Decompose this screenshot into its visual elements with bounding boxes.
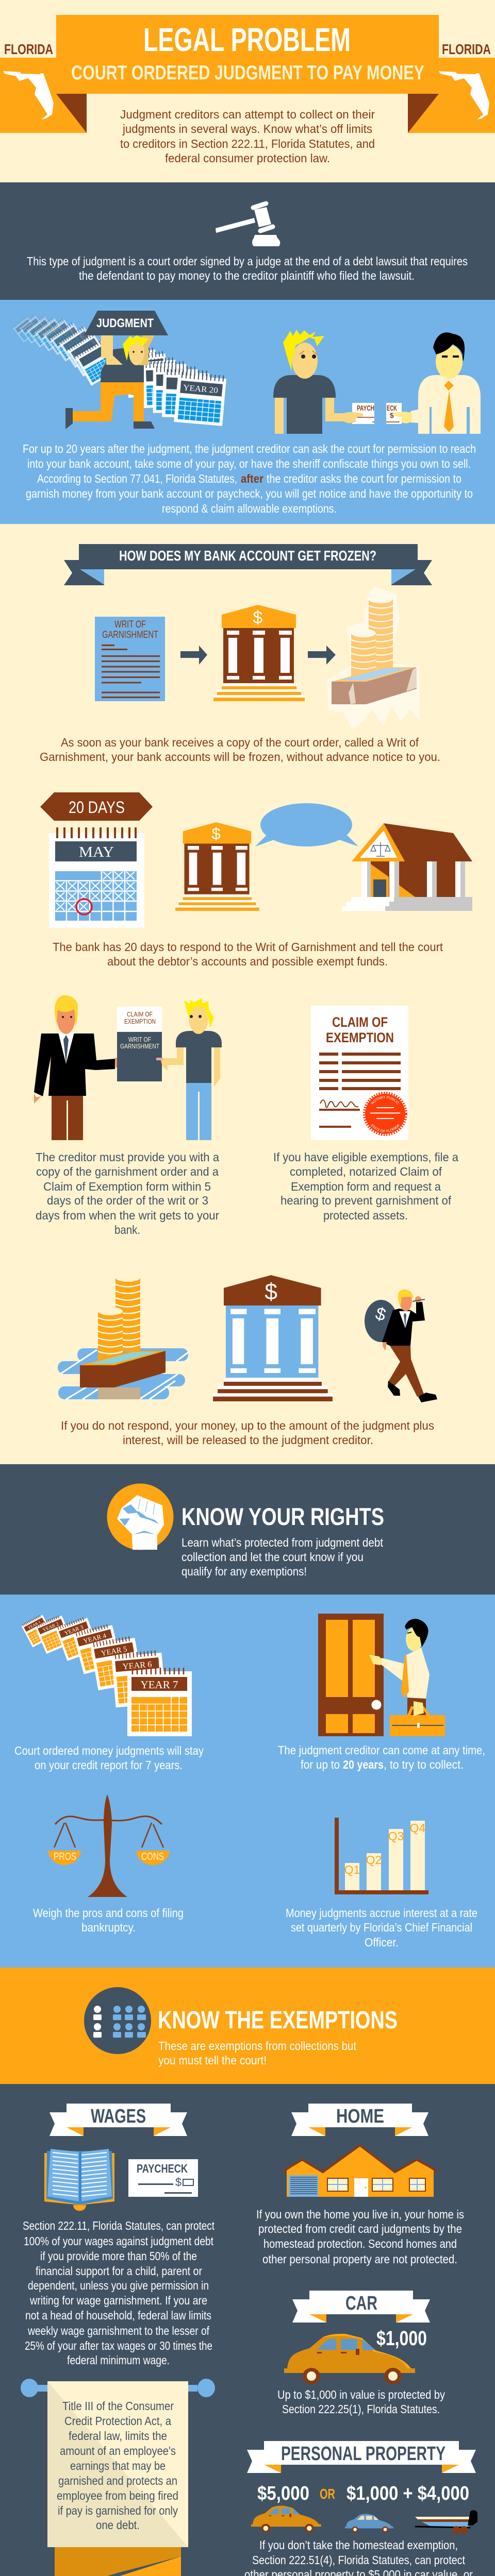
icon: writ of garnishment document bbox=[95, 617, 165, 701]
icon: people group bbox=[84, 1987, 151, 2054]
notary seal: STATE OF FLORIDA bbox=[371, 1124, 400, 1132]
scroll callout: federal law: Credit Protection Act, a bbox=[64, 2414, 171, 2428]
paycheck torn in two: PAYCH bbox=[357, 404, 374, 413]
definition text bbox=[27, 255, 468, 282]
creditor must provide text: days from when the writ gets to your bbox=[36, 1209, 219, 1222]
paycheck torn in two: $ bbox=[390, 411, 394, 419]
creditor must provide text: The creditor must provide you with a bbox=[36, 1150, 219, 1164]
credit report text: Court ordered money judgments will stay bbox=[14, 1744, 204, 1757]
document: claim and writ: GARNISHMENT bbox=[120, 1042, 159, 1050]
figure: creditor walking with money sack bbox=[365, 1290, 437, 1402]
panel: rights facts bbox=[0, 1595, 495, 1968]
panel: definition bbox=[0, 182, 495, 300]
value: personal property limits bbox=[257, 2483, 469, 2504]
home text: If you own the home you live in, your home is bbox=[256, 2208, 464, 2221]
icon: seven year calendars: YEAR 5 bbox=[101, 1645, 128, 1658]
icon: bank talking: $ bbox=[211, 825, 221, 843]
wages text: not a head of household, federal law limits bbox=[25, 2309, 211, 2322]
car text bbox=[277, 2388, 445, 2416]
icon: paycheck bbox=[128, 2159, 198, 2197]
car text: Section 222.25(1), Florida Statutes. bbox=[282, 2402, 440, 2416]
eligible exemptions text: completed, notarized Claim of bbox=[290, 1165, 442, 1178]
document: claim and writ: CLAIM OF bbox=[127, 1010, 153, 1018]
header panel bbox=[0, 15, 495, 165]
icon: Florida right bbox=[439, 71, 489, 120]
icon: seven year calendars bbox=[21, 1614, 192, 1736]
icon: calendar year 20: YEAR 20 bbox=[183, 383, 219, 395]
figure: creditor walking with money sack: $ bbox=[373, 1303, 388, 1325]
badge: 20 days: 20 DAYS bbox=[69, 798, 125, 817]
credit report text: on your credit report for 7 years. bbox=[35, 1758, 183, 1772]
car text: Up to $1,000 in value is protected by bbox=[277, 2388, 445, 2401]
scroll callout: federal law: garnished and protects an bbox=[58, 2474, 177, 2487]
rights intro text: collection and let the court know if you bbox=[182, 1550, 364, 1564]
wages text bbox=[23, 2219, 214, 2367]
ribbon: wages: WAGES bbox=[91, 2106, 146, 2127]
icon: bank paying out: $ bbox=[265, 1279, 277, 1304]
icon: fan of calendars bbox=[12, 314, 209, 418]
home text: protected from credit card judgments by the bbox=[258, 2222, 462, 2235]
arrow: writ to bank bbox=[180, 646, 207, 665]
rights intro text: qualify for any exemptions! bbox=[182, 1565, 307, 1578]
rights intro text: Learn what’s protected from judgment debt bbox=[182, 1536, 384, 1549]
heading: know the exemptions: KNOW THE EXEMPTIONS bbox=[158, 2007, 398, 2034]
notary seal bbox=[363, 1092, 407, 1136]
any time text: 20 years bbox=[343, 1758, 384, 1771]
scroll callout: federal law: one debt. bbox=[96, 2518, 140, 2532]
intro text: to creditors in Section 222.11, Florida Statutes, and bbox=[120, 137, 375, 150]
interest text bbox=[286, 1906, 477, 1949]
home text: other personal property are not protected. bbox=[262, 2252, 457, 2266]
scroll callout: federal law: earnings that may be bbox=[70, 2459, 166, 2472]
icon: claim of exemption form: CLAIM OF bbox=[332, 1014, 388, 1030]
judgment label: JUDGMENT bbox=[96, 316, 154, 330]
exemptions intro text bbox=[158, 2039, 357, 2067]
wages text: weekly wage garnishment to the lesser of bbox=[27, 2324, 210, 2337]
document: claim and writ: EXEMPTION bbox=[124, 1018, 156, 1025]
creditor must provide text: days of the order of the writ or 3 bbox=[47, 1194, 208, 1207]
rights intro text bbox=[182, 1536, 384, 1578]
judgment paragraph: respond & claim allowable exemptions. bbox=[162, 502, 337, 515]
paycheck torn in two bbox=[344, 403, 402, 424]
icon: May calendar bbox=[49, 827, 144, 928]
icon: seven year calendars: YEAR 3 bbox=[64, 1624, 85, 1637]
wages text: 25% of your after tax wages or 30 times the bbox=[25, 2339, 212, 2352]
wages text: dependent, unless you give permission in bbox=[28, 2279, 209, 2292]
home text bbox=[256, 2208, 464, 2266]
heading ribbon: HOW DOES MY BANK ACCOUNT GET FROZEN? bbox=[119, 548, 376, 564]
icon: boat on trailer bbox=[415, 2510, 477, 2534]
document: claim and writ bbox=[117, 1007, 162, 1081]
eligible exemptions text: protected assets. bbox=[323, 1209, 408, 1222]
intro text: Judgment creditors can attempt to collect on their bbox=[120, 108, 375, 121]
eligible exemptions text bbox=[273, 1150, 458, 1222]
intro text bbox=[120, 108, 375, 165]
icon: claim of exemption form bbox=[311, 1006, 408, 1140]
icon: bank talking bbox=[175, 822, 259, 911]
any time text bbox=[278, 1743, 485, 1771]
20 days text: The bank has 20 days to respond to the Writ of Garnishment and tell the court bbox=[53, 940, 443, 954]
ribbon: wages bbox=[50, 2104, 187, 2136]
document: claim and writ: WRIT OF bbox=[128, 1036, 151, 1043]
chart: quarterly interest: Q3 bbox=[388, 1829, 404, 1843]
icon: seven year calendars: YEAR 1 bbox=[27, 1620, 42, 1630]
wages text: if you provide more than 50% of the bbox=[40, 2249, 197, 2263]
creditor must provide text bbox=[36, 1150, 219, 1236]
exemptions intro text: you must tell the court! bbox=[158, 2054, 267, 2067]
bankruptcy text: bankruptcy. bbox=[81, 1921, 136, 1934]
icon: seven year calendars: YEAR 6 bbox=[122, 1659, 152, 1671]
exemptions intro text: These are exemptions from collections but bbox=[158, 2039, 357, 2053]
chart: quarterly interest: Q1 bbox=[344, 1863, 360, 1876]
ribbon: car: CAR bbox=[345, 2293, 377, 2314]
panel: exemptions list bbox=[0, 2084, 495, 2576]
ribbon: home: HOME bbox=[336, 2106, 384, 2127]
icon: frozen coins and cash bbox=[327, 586, 420, 730]
icon: law book bbox=[44, 2149, 114, 2211]
figure: creditor with paycheck bbox=[392, 332, 481, 434]
icon: door and creditor bbox=[318, 1614, 445, 1736]
heading ribbon bbox=[64, 544, 432, 585]
value: personal property limits: $5,000 bbox=[257, 2483, 309, 2504]
any time text: for up to bbox=[301, 1758, 340, 1771]
icon: courthouse bbox=[342, 823, 472, 911]
chart: quarterly interest: Q4 bbox=[410, 1821, 426, 1835]
icon: calendar year 20 bbox=[174, 371, 226, 426]
scroll callout: federal law: Title III of the Consumer bbox=[62, 2399, 174, 2413]
scroll callout: federal law: employee from being fired bbox=[57, 2489, 178, 2502]
frozen text bbox=[40, 736, 440, 764]
wages text: 100% of your wages against judgment debt bbox=[24, 2234, 214, 2248]
title: LEGAL PROBLEM bbox=[143, 21, 351, 58]
icon: orange car bbox=[251, 2505, 321, 2533]
scroll callout: federal law: if pay is garnished for only bbox=[58, 2504, 178, 2517]
personal property text: If you don’t take the homestead exemption, bbox=[259, 2538, 458, 2552]
value: car limit: $1,000 bbox=[376, 2327, 427, 2350]
judgment paragraph: the creditor asks the court for permission to bbox=[267, 472, 461, 485]
bankruptcy text bbox=[33, 1906, 184, 1934]
paycheck torn in two: ECK bbox=[387, 404, 397, 413]
judgment paragraph bbox=[23, 442, 476, 515]
icon: pros and cons scale: CONS bbox=[141, 1851, 164, 1862]
icon: bank bbox=[213, 605, 305, 701]
icon: blue car bbox=[345, 2514, 393, 2533]
judgment paragraph: after bbox=[241, 472, 263, 485]
wages text: financial support for a child, parent or bbox=[36, 2264, 202, 2278]
judgment weight bbox=[84, 311, 168, 335]
icon: pros and cons scale: PROS bbox=[54, 1851, 76, 1862]
icon: raised fist bbox=[107, 1484, 173, 1550]
eligible exemptions text: If you have eligible exemptions, file a bbox=[273, 1150, 458, 1164]
icon: writ of garnishment document: GARNISHMENT bbox=[102, 630, 158, 640]
scroll callout: federal law: federal law, limits the bbox=[69, 2429, 167, 2443]
notary seal: NOTARY PUBLIC bbox=[371, 1096, 399, 1105]
figure: creditor in suit bbox=[34, 995, 126, 1140]
ribbon: home bbox=[291, 2104, 428, 2136]
ribbon: car bbox=[292, 2291, 430, 2323]
icon: writ of garnishment document: WRIT OF bbox=[114, 619, 146, 630]
no response text: If you do not respond, your money, up to the amount of the judgment plus bbox=[61, 1419, 434, 1432]
chart: quarterly interest bbox=[335, 1818, 428, 1894]
intro text: federal consumer protection law. bbox=[165, 151, 330, 165]
icon: seven year calendars: YEAR 2 bbox=[42, 1622, 60, 1633]
20 days text bbox=[53, 940, 443, 968]
chart: quarterly interest: Q2 bbox=[366, 1853, 382, 1867]
badge: 20 days bbox=[40, 792, 153, 821]
icon: car bbox=[284, 2334, 415, 2384]
icon: seven year calendars: YEAR 4 bbox=[82, 1632, 107, 1645]
figure: debtor with paycheck bbox=[273, 330, 344, 434]
icon: Florida left bbox=[3, 71, 54, 120]
wages text: Section 222.11, Florida Statutes, can protect bbox=[23, 2219, 214, 2232]
bankruptcy text: Weigh the pros and cons of filing bbox=[33, 1906, 184, 1920]
home text: homestead protection. Second homes and bbox=[263, 2237, 457, 2250]
icon: paycheck: PAYCHECK bbox=[137, 2162, 188, 2175]
icon: claim of exemption form: EXEMPTION bbox=[326, 1030, 394, 1045]
ribbon banner bbox=[0, 15, 495, 133]
icon: May calendar: MAY bbox=[79, 844, 114, 860]
icon: bank: $ bbox=[253, 608, 263, 628]
panel: know the exemptions header bbox=[0, 1968, 495, 2084]
personal property text: Section 222.51(4), Florida Statutes, can protect bbox=[252, 2553, 466, 2567]
creditor must provide text: copy of the garnishment order and a bbox=[36, 1165, 219, 1178]
judgment paragraph: According to Section 77.041, Florida Statutes, bbox=[37, 472, 237, 485]
creditor must provide text: bank. bbox=[114, 1223, 140, 1236]
arrow: bank to frozen money bbox=[308, 646, 336, 665]
ribbon: personal property bbox=[247, 2441, 476, 2473]
frozen text: As soon as your bank receives a copy of the court order, called a Writ of bbox=[61, 736, 419, 749]
creditor must provide text: Claim of Exemption form within 5 bbox=[43, 1180, 211, 1193]
icon: bank paying out bbox=[213, 1275, 333, 1401]
heading: know your rights: KNOW YOUR RIGHTS bbox=[182, 1503, 384, 1530]
20 days text: about the debtor’s accounts and possible exempt funds. bbox=[107, 955, 388, 968]
scroll callout: federal law: amount of an employee's bbox=[60, 2444, 176, 2458]
icon: house bbox=[285, 2144, 436, 2197]
wages text: federal minimum wage. bbox=[67, 2353, 170, 2367]
personal property text bbox=[244, 2538, 473, 2576]
value: personal property limits: $1,000 + $4,000 bbox=[346, 2483, 469, 2504]
icon: seven year calendars: YEAR 7 bbox=[141, 1679, 178, 1691]
wages text: writing for wage garnishment. If you are bbox=[29, 2294, 207, 2307]
value: personal property limits: OR bbox=[320, 2486, 335, 2502]
interest text: Officer. bbox=[365, 1936, 399, 1949]
no response text: interest, will be released to the judgment creditor. bbox=[123, 1433, 373, 1447]
eligible exemptions text: hearing to prevent garnishment of bbox=[280, 1194, 452, 1207]
label: Florida left: FLORIDA bbox=[4, 41, 53, 57]
panel: know your rights header bbox=[0, 1464, 495, 1595]
icon: speech bubble bbox=[255, 803, 358, 846]
figure: kneeling debtor holding judgment bbox=[65, 311, 168, 429]
icon: coins released from broken block bbox=[58, 1274, 188, 1399]
definition text: the defendant to pay money to the creditor plaintiff who filed the lawsuit. bbox=[79, 269, 415, 282]
credit report text bbox=[14, 1744, 204, 1772]
panel: 20 year judgment bbox=[0, 300, 495, 524]
icon: gavel bbox=[216, 204, 280, 246]
any time text: , to try to collect. bbox=[384, 1758, 464, 1771]
frozen text: Garnishment, your bank accounts will be frozen, without advance notice to you. bbox=[40, 750, 440, 764]
icon: paycheck: $ bbox=[175, 2176, 182, 2189]
figure: debtor receiving documents bbox=[156, 998, 222, 1140]
panel: how accounts get frozen bbox=[34, 544, 472, 1447]
no response text bbox=[61, 1419, 434, 1447]
icon: pros and cons scale bbox=[48, 1794, 170, 1897]
intro text: judgments in several ways. Know what’s off limits bbox=[122, 122, 372, 135]
eligible exemptions text: Exemption form and request a bbox=[291, 1180, 441, 1193]
scroll callout: federal law bbox=[21, 2379, 215, 2576]
